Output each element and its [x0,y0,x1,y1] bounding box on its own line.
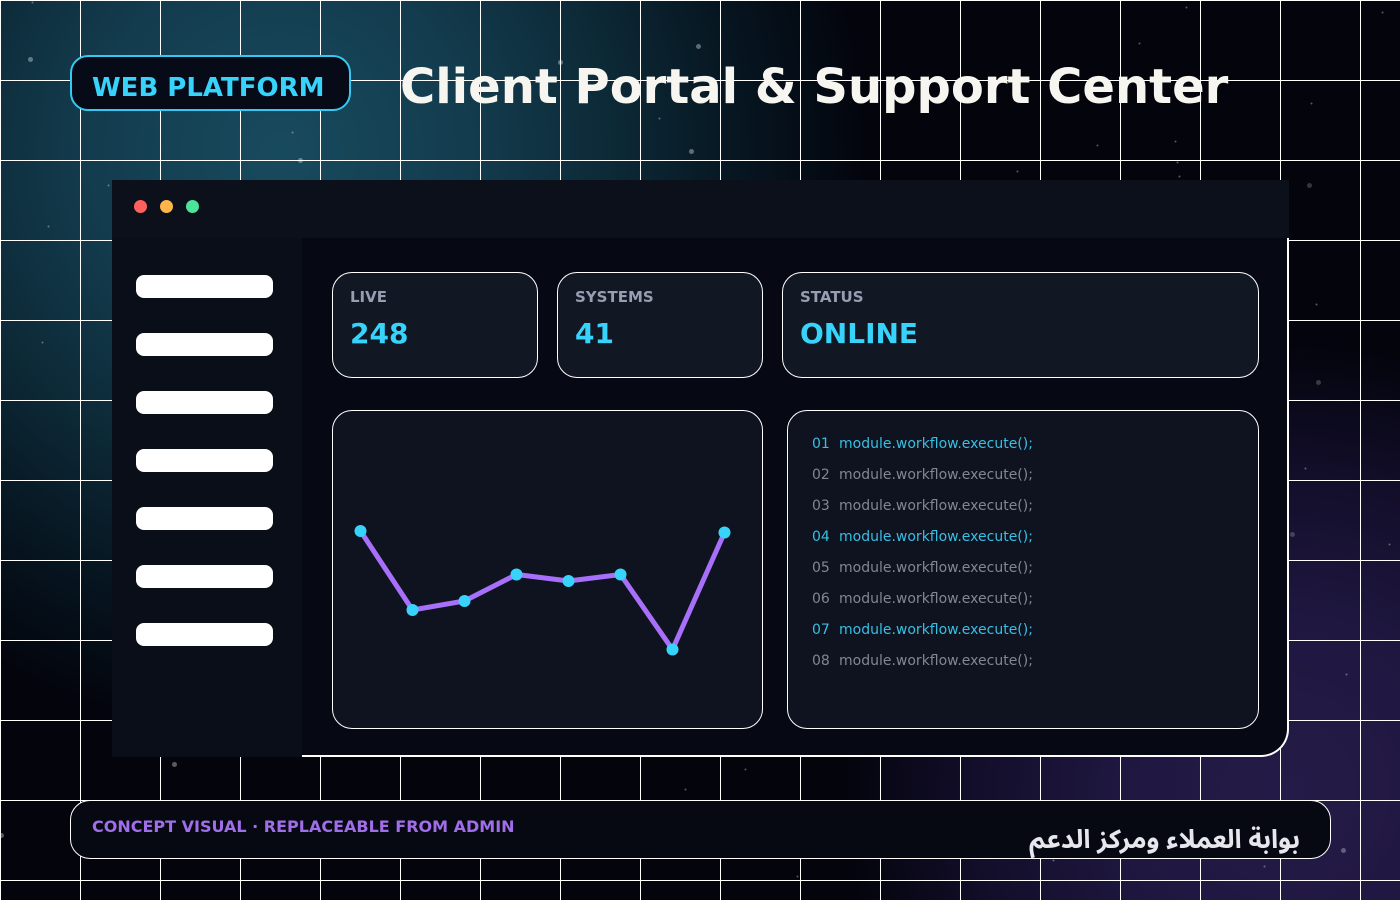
stat card: live: LIVE [350,288,387,306]
stat card: live [332,272,538,378]
panel: line chart [332,410,763,729]
window control dots [134,200,199,213]
sidebar menu items [136,275,273,646]
stat card: status: STATUS [800,288,864,306]
panel: code log: 08 [812,653,830,669]
panel: code log [787,410,1259,729]
stat card: status [782,272,1259,378]
stat card: status: ONLINE [800,317,918,350]
stat card: systems [557,272,763,378]
panel: code log: 01 [812,436,830,452]
panel: app window [112,180,1289,757]
line chart [354,525,730,656]
panel: code log: 04 [812,529,830,545]
stat card: systems: SYSTEMS [575,288,654,306]
panel: code log: module.workflow.execute(); [839,467,1033,483]
stat card: live: 248 [350,317,408,350]
panel: code log: module.workflow.execute(); [839,529,1033,545]
panel: code log: 06 [812,591,830,607]
panel: code log: 05 [812,560,830,576]
badge label: WEB PLATFORM [92,73,325,103]
panel: code log: 07 [812,622,830,638]
badge: web platform [70,55,351,111]
sidebar [112,238,302,757]
panel: code log: 02 [812,467,830,483]
footer note: CONCEPT VISUAL · REPLACEABLE FROM ADMIN [92,817,515,836]
panel: code log: module.workflow.execute(); [839,498,1033,514]
panel: code log: 03 [812,498,830,514]
panel: code log: module.workflow.execute(); [839,436,1033,452]
panel: code log: module.workflow.execute(); [839,560,1033,576]
stat card: systems: 41 [575,317,614,350]
main content area [112,238,1289,757]
arabic subtitle: بوابة العملاء ومركز الدعم [1029,813,1300,868]
title: Client Portal & Support Center [400,59,1228,115]
panel: code log: module.workflow.execute(); [839,622,1033,638]
window title bar [112,180,1289,238]
footer bar [70,800,1331,859]
panel: code log: module.workflow.execute(); [839,653,1033,669]
panel: code log: module.workflow.execute(); [839,591,1033,607]
